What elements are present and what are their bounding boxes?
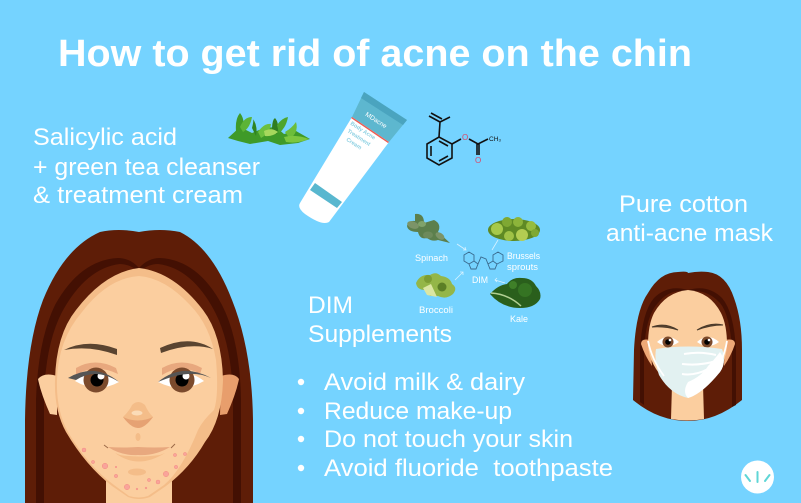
icon: treatment cream tube: MDacne (364, 111, 388, 130)
icon: salicylic acid molecule: O (462, 133, 468, 142)
title: How to get rid of acne on the chin (58, 33, 692, 75)
logo badge (741, 460, 774, 494)
hair strands (640, 288, 736, 407)
icon: green tea leaves (228, 113, 310, 145)
hair (25, 230, 253, 503)
text block: pure cotton mask: anti-acne mask (606, 220, 774, 247)
illustration: woman wearing mask (633, 272, 742, 421)
icon: treatment cream tube: Body Acne (349, 121, 376, 141)
icon: salicylic acid molecule: O (475, 156, 481, 165)
ear left (38, 375, 57, 415)
text block: salicylic acid treatment: + green tea cleanser (33, 154, 260, 181)
text block: DIM supplements: Supplements (308, 321, 452, 348)
icon: treatment cream tube (299, 92, 407, 223)
neck (671, 385, 704, 420)
icon: treatment cream tube: Treatment (346, 128, 371, 148)
text block: pure cotton mask: Pure cotton (619, 191, 748, 218)
eyebrows (652, 324, 723, 330)
text block: DIM supplements (308, 292, 452, 348)
arrows to DIM molecule (455, 240, 505, 283)
labels: foods: Kale (510, 314, 528, 324)
labels: foods: DIM (472, 275, 488, 285)
acne spots (82, 448, 187, 490)
text block: salicylic acid treatment: Salicylic acid (33, 124, 177, 151)
icon: brussels sprouts (488, 217, 540, 241)
labels: foods (415, 251, 540, 324)
face (55, 268, 223, 499)
face (648, 290, 727, 398)
hair (633, 272, 742, 421)
labels: foods: Spinach (415, 253, 448, 263)
list: lifestyle tips: Reduce make-up (324, 398, 512, 425)
face mask (648, 341, 727, 398)
icon: treatment cream tube: Cream (345, 137, 362, 151)
text block: pure cotton mask (606, 191, 774, 247)
hair strands (36, 258, 241, 503)
icon: broccoli (416, 273, 455, 298)
text block: salicylic acid treatment (33, 124, 260, 209)
eye left (68, 362, 119, 392)
text block: salicylic acid treatment: & treatment cream (33, 182, 243, 209)
eyes (657, 336, 719, 348)
list: lifestyle tips: Avoid milk & dairy (324, 369, 525, 396)
icon: DIM molecule (464, 252, 503, 269)
neck (106, 470, 172, 503)
list: lifestyle tips: Do not touch your skin (324, 426, 573, 453)
icon: salicylic acid molecule (427, 113, 501, 165)
eye right (158, 362, 211, 392)
eyebrow right (160, 341, 213, 353)
labels: foods: Broccoli (419, 305, 453, 315)
icon: kale (490, 278, 540, 308)
chart: DIM food sources diagram (406, 214, 540, 324)
list: lifestyle tips: Avoid fluoride toothpaste (324, 455, 613, 482)
labels: foods: sprouts (507, 262, 539, 272)
text block: DIM supplements: DIM (308, 292, 353, 319)
ear right (220, 375, 239, 415)
nose (123, 402, 153, 428)
icon: spinach (406, 214, 450, 243)
illustration: woman with chin acne (25, 230, 253, 503)
labels: foods: Brussels (507, 251, 540, 261)
list: lifestyle tips (298, 369, 613, 482)
ears (641, 340, 735, 366)
eyebrow left (64, 344, 117, 355)
mouth (104, 444, 175, 476)
icon: salicylic acid molecule: CH₃ (489, 136, 501, 143)
